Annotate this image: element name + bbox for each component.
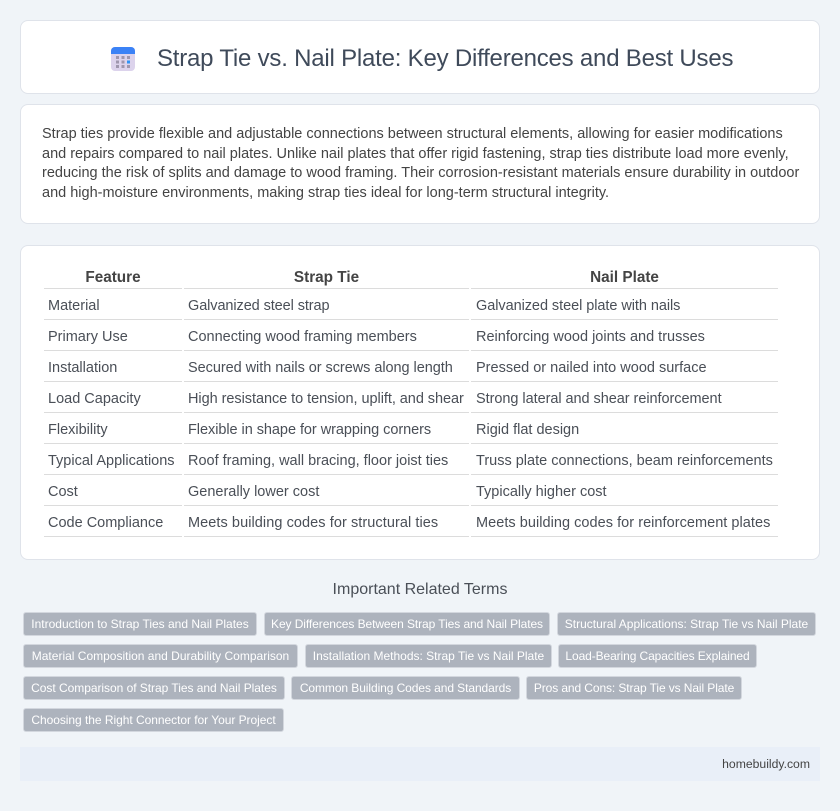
table header: Nail Plate — [590, 269, 659, 286]
comparison table: Generally lower cost — [188, 484, 319, 500]
related terms tags — [23, 612, 816, 732]
comparison table: Rigid flat design — [476, 422, 579, 438]
comparison table: High resistance to tension, uplift, and shear — [188, 391, 464, 407]
intro paragraph: and high-moisture environments, making strap ties ideal for long-term structural integrity. — [42, 185, 609, 201]
related terms tags: Common Building Codes and Standards — [300, 681, 511, 695]
comparison table: Installation — [48, 360, 117, 376]
comparison table: Secured with nails or screws along length — [188, 360, 453, 376]
comparison table: Truss plate connections, beam reinforcements — [476, 453, 773, 469]
intro text panel — [20, 104, 820, 224]
footer source text: homebuildy.com — [722, 757, 810, 771]
related terms tags: Load-Bearing Capacities Explained — [565, 649, 750, 663]
comparison table panel — [20, 245, 820, 560]
comparison table: Flexible in shape for wrapping corners — [188, 422, 431, 438]
comparison table: Galvanized steel strap — [188, 298, 329, 314]
intro paragraph: reducing the risk of splits and damage to wood framing. Their corrosion-resistant materials ensure durability in outdoor — [42, 165, 799, 181]
related terms tags: Key Differences Between Strap Ties and Nail Plates — [271, 617, 543, 631]
comparison table: Flexibility — [48, 422, 108, 438]
related terms tags: Introduction to Strap Ties and Nail Plates — [31, 617, 249, 631]
related terms tags: Pros and Cons: Strap Tie vs Nail Plate — [534, 681, 734, 695]
comparison table: Meets building codes for structural ties — [188, 515, 438, 531]
footer bar — [20, 747, 820, 781]
related terms tags: Cost Comparison of Strap Ties and Nail Plates — [31, 681, 277, 695]
comparison table: Strong lateral and shear reinforcement — [476, 391, 722, 407]
comparison table: Cost — [48, 484, 78, 500]
related terms tags: Structural Applications: Strap Tie vs Nail Plate — [565, 617, 808, 631]
comparison table: Typical Applications — [48, 453, 175, 469]
intro paragraph: Strap ties provide flexible and adjustable connections between structural elements, allowing for easier modifications — [42, 126, 783, 142]
comparison table: Material — [48, 298, 100, 314]
intro paragraph — [42, 126, 800, 201]
title: Strap Tie vs. Nail Plate: Key Differences and Best Uses — [157, 45, 733, 72]
related terms tags: Material Composition and Durability Comparison — [32, 649, 289, 663]
header panel — [20, 20, 820, 94]
comparison table: Reinforcing wood joints and trusses — [476, 329, 705, 345]
table header: Feature — [85, 269, 141, 286]
related terms tags: Choosing the Right Connector for Your Project — [31, 713, 276, 727]
intro paragraph: and repairs compared to nail plates. Unlike nail plates that offer rigid fastening, strap ties distribute load more evenly, — [42, 146, 789, 162]
related terms tags: Installation Methods: Strap Tie vs Nail Plate — [313, 649, 544, 663]
comparison table: Load Capacity — [48, 391, 141, 407]
comparison table: Code Compliance — [48, 515, 163, 531]
comparison table: Roof framing, wall bracing, floor joist ties — [188, 453, 448, 469]
icon: calendar — [111, 47, 135, 71]
comparison table: Typically higher cost — [476, 484, 607, 500]
comparison table: Meets building codes for reinforcement plates — [476, 515, 770, 531]
comparison table: Connecting wood framing members — [188, 329, 417, 345]
comparison table: Primary Use — [48, 329, 128, 345]
table header: Strap Tie — [294, 269, 359, 286]
comparison table — [44, 269, 778, 537]
table header — [85, 269, 659, 286]
comparison table: Pressed or nailed into wood surface — [476, 360, 707, 376]
comparison table: Galvanized steel plate with nails — [476, 298, 680, 314]
related terms heading: Important Related Terms — [333, 581, 507, 598]
